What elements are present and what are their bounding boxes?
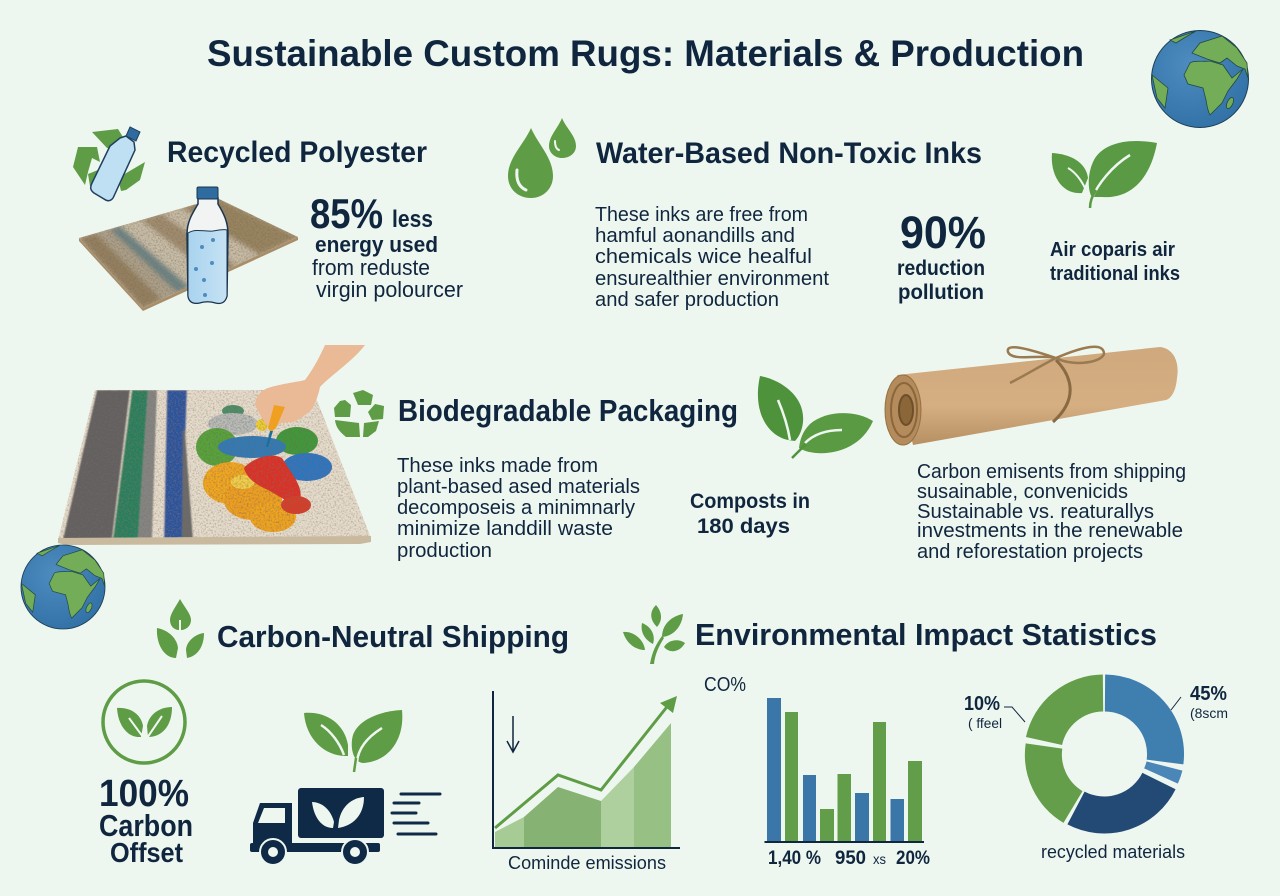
- text block: production: [397, 540, 492, 562]
- stat: 85% less energy: [310, 190, 463, 302]
- text block: [397, 455, 640, 562]
- caption: comparison: [1050, 239, 1180, 285]
- stat: 85% less energy: energy used: [315, 232, 438, 257]
- icon: sprout: [157, 599, 204, 658]
- stat: composts in 180 days: 180 days: [697, 515, 790, 538]
- rug edge: [58, 536, 371, 545]
- stat: 90% reduction pollution: [897, 207, 986, 304]
- panel: environmental impact statistics: [623, 605, 1228, 869]
- icon: recycling arrows with bottle: [73, 127, 145, 201]
- text block: [595, 203, 829, 311]
- heading: Recycled Polyester: [167, 136, 427, 169]
- bar labels: 950: [835, 848, 866, 869]
- chart: bar chart: [704, 674, 930, 869]
- icon: delivery truck: [250, 788, 440, 865]
- stat: 100% carbon offset: 100%: [99, 773, 189, 815]
- icon: leaves: [1052, 141, 1157, 208]
- bar labels: [768, 848, 930, 869]
- bar labels: 1,40 %: [768, 848, 821, 869]
- label: 45%: [1171, 683, 1228, 721]
- caption: comparison: Air coparis air: [1050, 239, 1175, 261]
- baseline: [764, 841, 924, 843]
- chart: donut chart: [964, 683, 1228, 862]
- text block: Sustainable vs. reaturallys: [917, 501, 1154, 523]
- donut segments: [1043, 693, 1166, 815]
- panel: recycled polyester: [70, 127, 463, 315]
- icon: leaves above truck: [304, 710, 402, 772]
- stat: 85% less energy: virgin polourcer: [316, 277, 463, 302]
- text block: hamful aonandills and: [595, 224, 795, 247]
- icon: globe bottom left: [21, 545, 105, 629]
- area segments: [495, 723, 671, 847]
- chart caption: Cominde emissions: [508, 853, 666, 873]
- illustration: large rug with hand painting: [50, 345, 380, 545]
- rug base: [58, 390, 370, 538]
- stat: 85% less energy: 85%: [310, 190, 383, 237]
- illustration: kraft paper roll: [885, 347, 1178, 445]
- bar labels: 20%: [896, 848, 930, 869]
- brush: [266, 405, 285, 447]
- text block: minimize landdill waste: [397, 518, 613, 540]
- stat: 100% carbon offset: Carbon: [99, 808, 193, 843]
- stat: 85% less energy: from reduste: [312, 255, 430, 280]
- stat: 85% less energy: less: [392, 206, 433, 233]
- arrow: down: [507, 716, 519, 752]
- rug: striped small rug: [79, 198, 298, 311]
- panel: water-based inks: [508, 118, 1180, 311]
- label: 45%: 45%: [1190, 683, 1227, 705]
- stat: 100% carbon offset: [99, 773, 193, 868]
- icon: leafy branch: [623, 605, 685, 664]
- stat: 90% reduction pollution: pollution: [898, 281, 984, 304]
- hand: [255, 345, 365, 430]
- badge: leaf ring: [103, 681, 185, 763]
- donut caption: recycled materials: [1041, 842, 1185, 862]
- title: Sustainable Custom Rugs: Materials & Production: [207, 33, 1084, 74]
- label: 10%: ( ffeel: [968, 715, 1002, 731]
- heading: Biodegradable Packaging: [398, 393, 738, 428]
- text block: [917, 461, 1186, 563]
- icon: recycle arrows: [334, 390, 384, 437]
- caption: comparison: traditional inks: [1050, 263, 1180, 285]
- stat: composts in 180 days: [690, 490, 810, 538]
- stat: composts in 180 days: Composts in: [690, 490, 810, 513]
- icon: plastic bottle: [187, 187, 228, 303]
- text block: and safer production: [595, 288, 779, 311]
- label: 45%: (8scm: [1190, 705, 1228, 721]
- stat: 100% carbon offset: Offset: [110, 837, 183, 868]
- icon: leaves: [758, 376, 873, 458]
- trend arrow: [495, 696, 677, 828]
- panel: biodegradable packaging: [334, 347, 1186, 563]
- heading: Water-Based Non-Toxic Inks: [596, 137, 982, 170]
- text block: plant-based ased materials: [397, 476, 640, 498]
- text block: and reforestation projects: [917, 541, 1143, 563]
- text block: These inks are free from: [595, 203, 808, 226]
- heading: Environmental Impact Statistics: [695, 617, 1157, 652]
- text block: Carbon emisents from shipping: [917, 461, 1186, 483]
- icon: globe top right: [1152, 30, 1248, 128]
- panel: carbon-neutral shipping: [99, 599, 680, 873]
- stat: 90% reduction pollution: 90%: [900, 207, 986, 258]
- label: 10%: 10%: [964, 693, 1000, 715]
- axis title: CO%: [704, 674, 746, 696]
- label: 10%: [964, 693, 1025, 731]
- text block: These inks made from: [397, 455, 598, 477]
- stat: 90% reduction pollution: reduction: [897, 257, 985, 280]
- icon: water drops: [508, 118, 576, 198]
- axes: [493, 691, 680, 848]
- paint splash: [196, 405, 332, 532]
- heading: Carbon-Neutral Shipping: [217, 619, 569, 654]
- bars: [767, 698, 922, 842]
- text block: decomposeis a minimnarly: [397, 497, 635, 519]
- chart: emissions area chart: [493, 691, 680, 873]
- text block: investments in the renewable: [917, 520, 1183, 542]
- text block: ensurealthier environment: [595, 267, 829, 290]
- text block: chemicals wice healful: [595, 245, 812, 268]
- text block: susainable, convenicids: [917, 481, 1128, 503]
- bar labels: xs: [873, 851, 886, 867]
